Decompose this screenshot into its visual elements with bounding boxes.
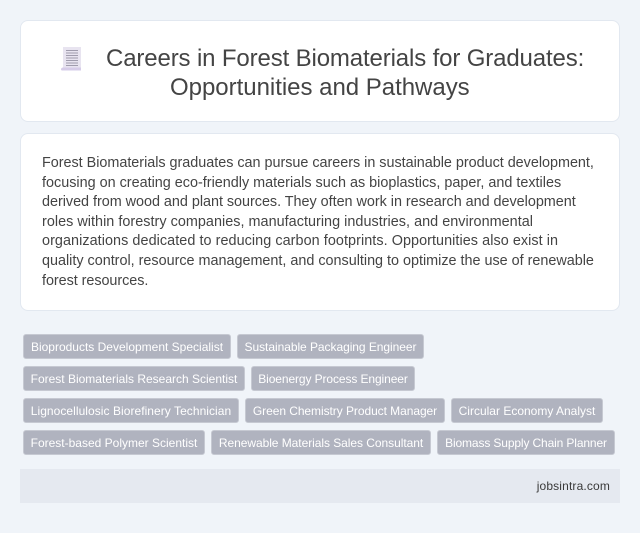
tag: [437, 430, 615, 455]
icon: document scroll: [61, 47, 81, 70]
panel: description card: [20, 133, 620, 311]
title: Opportunities and Pathways: [170, 74, 470, 101]
tag: [23, 430, 205, 455]
tag: Biomass Supply Chain Planner: [445, 436, 607, 450]
tag: Forest-based Polymer Scientist: [31, 436, 197, 450]
text block: description: organizations dedicated to reducing carbon footprints. Opportunities also exist in: [42, 233, 558, 249]
tag: Green Chemistry Product Manager: [253, 404, 437, 418]
tag: [251, 366, 415, 391]
tag: [451, 398, 603, 423]
text block: description: [42, 155, 594, 289]
tag: [245, 398, 445, 423]
tag: Forest Biomaterials Research Scientist: [31, 372, 237, 386]
tag: [23, 334, 231, 359]
tag: Bioproducts Development Specialist: [31, 340, 223, 354]
tag: [23, 366, 245, 391]
tag: Lignocellulosic Biorefinery Technician: [31, 404, 231, 418]
tag: [23, 398, 239, 423]
tag: [211, 430, 431, 455]
tag: Renewable Materials Sales Consultant: [219, 436, 423, 450]
text block: description: focusing on creating eco-friendly materials such as bioplastics, paper, and textiles: [42, 175, 561, 191]
tags: career titles: [23, 334, 615, 455]
text block: description: forest resources.: [42, 273, 148, 289]
tag: [237, 334, 424, 359]
footer bar: [20, 469, 620, 503]
panel: header card: [20, 20, 620, 122]
text block: description: Forest Biomaterials graduates can pursue careers in sustainable product development,: [42, 155, 594, 171]
title: Careers in Forest Biomaterials for Graduates:: [106, 45, 584, 72]
tag: Sustainable Packaging Engineer: [245, 340, 416, 354]
title: [106, 45, 584, 101]
tag: Bioenergy Process Engineer: [258, 372, 408, 386]
footer text: jobsintra.com: [537, 479, 610, 493]
text block: description: derived from wood and plant sources. They often work in research and development: [42, 194, 576, 210]
tag: Circular Economy Analyst: [459, 404, 595, 418]
text block: description: quality control, resource management, and consulting to optimize the use of renewable: [42, 253, 594, 269]
text block: description: roles within forestry companies, manufacturing industries, and environmental: [42, 214, 533, 230]
